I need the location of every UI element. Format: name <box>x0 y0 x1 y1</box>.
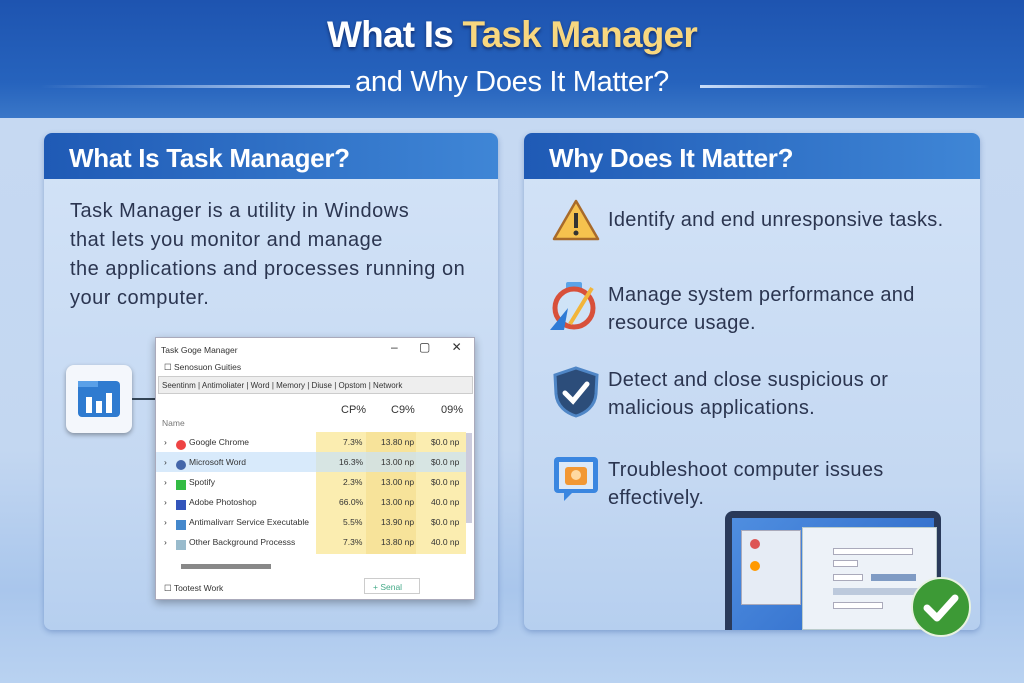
item: troubleshoot: effectively. <box>608 487 704 509</box>
task manager window: CP% <box>341 404 366 416</box>
task manager window: ☐ Senosuon Guities <box>164 362 241 372</box>
text block: definition: Task Manager is a utility in Windows <box>70 200 409 222</box>
task manager window: Task Goge Manager <box>161 345 238 355</box>
task manager window: › <box>164 437 167 447</box>
task manager window: 13.00 np <box>381 477 414 487</box>
task manager window: 2.3% <box>343 477 362 487</box>
heading: what is: What Is Task Manager? <box>69 143 350 173</box>
task manager window: ☐ Tootest Work <box>164 583 223 593</box>
task manager window: Antimalivarr Service Executable <box>189 517 309 527</box>
task manager window: 13.80 np <box>381 437 414 447</box>
task manager window: 13.90 np <box>381 517 414 527</box>
task manager window: › <box>164 457 167 467</box>
illustration: laptop with settings <box>725 511 941 630</box>
task manager window: › <box>164 517 167 527</box>
text block: definition: that lets you monitor and manage <box>70 229 383 251</box>
header band <box>0 0 1024 118</box>
task manager window: 16.3% <box>339 457 363 467</box>
item: troubleshoot <box>608 459 884 509</box>
item: security: Detect and close suspicious or <box>608 369 888 391</box>
heading: what is <box>44 133 498 179</box>
task manager window <box>155 337 475 600</box>
item: security: malicious applications. <box>608 397 815 419</box>
item: performance <box>608 284 915 334</box>
heading: why <box>524 133 980 179</box>
item: unresponsive tasks: Identify and end unresponsive tasks. <box>608 209 943 231</box>
task manager window: Google Chrome <box>189 437 249 447</box>
task manager window: 40.0 np <box>431 537 459 547</box>
icon: warning <box>552 200 600 240</box>
task manager window: + Senal <box>373 582 402 592</box>
task manager window: Microsoft Word <box>189 457 246 467</box>
task manager window: Name <box>162 418 185 428</box>
task manager window: $0.0 np <box>431 437 459 447</box>
icon: green check <box>911 577 971 637</box>
item: performance: resource usage. <box>608 312 756 334</box>
task manager window: 5.5% <box>343 517 362 527</box>
task manager window: 13.00 np <box>381 497 414 507</box>
task manager window: › <box>164 537 167 547</box>
task manager window: Other Background Processs <box>189 537 295 547</box>
item: security <box>608 369 888 419</box>
subtitle: and Why Does It Matter? <box>355 66 669 98</box>
item: troubleshoot: Troubleshoot computer issues <box>608 459 884 481</box>
task manager window: 7.3% <box>343 537 362 547</box>
panel: why does it matter <box>524 133 980 630</box>
task manager window: Spotify <box>189 477 215 487</box>
task manager window: $0.0 np <box>431 477 459 487</box>
task manager window: 13.80 np <box>381 537 414 547</box>
item: performance: Manage system performance and <box>608 284 915 306</box>
task manager window: 13.00 np <box>381 457 414 467</box>
text block: definition <box>70 200 465 309</box>
icon: task manager app <box>66 365 132 433</box>
task manager window: 40.0 np <box>431 497 459 507</box>
icon: performance gauge <box>550 282 596 330</box>
task manager window: Seentinm | Antimoliater | Word | Memory | Diuse | Opstom | Network <box>162 381 402 390</box>
task manager window: 7.3% <box>343 437 362 447</box>
task manager window: Adobe Photoshop <box>189 497 257 507</box>
task manager window: $0.0 np <box>431 517 459 527</box>
text block: definition: the applications and processes running on <box>70 258 465 280</box>
heading: why: Why Does It Matter? <box>549 143 793 173</box>
task manager window: $0.0 np <box>431 457 459 467</box>
task manager window: – ▢ ✕ <box>391 340 462 354</box>
task manager window: › <box>164 477 167 487</box>
panel: what is task manager <box>44 133 498 630</box>
title: What Is Task Manager <box>327 14 697 55</box>
task manager window: 66.0% <box>339 497 363 507</box>
icon: troubleshoot chat <box>554 457 598 501</box>
icon: shield <box>553 366 599 418</box>
task manager window: C9% <box>391 404 415 416</box>
task manager window: › <box>164 497 167 507</box>
task manager window: 09% <box>441 404 463 416</box>
text block: definition: your computer. <box>70 287 209 309</box>
